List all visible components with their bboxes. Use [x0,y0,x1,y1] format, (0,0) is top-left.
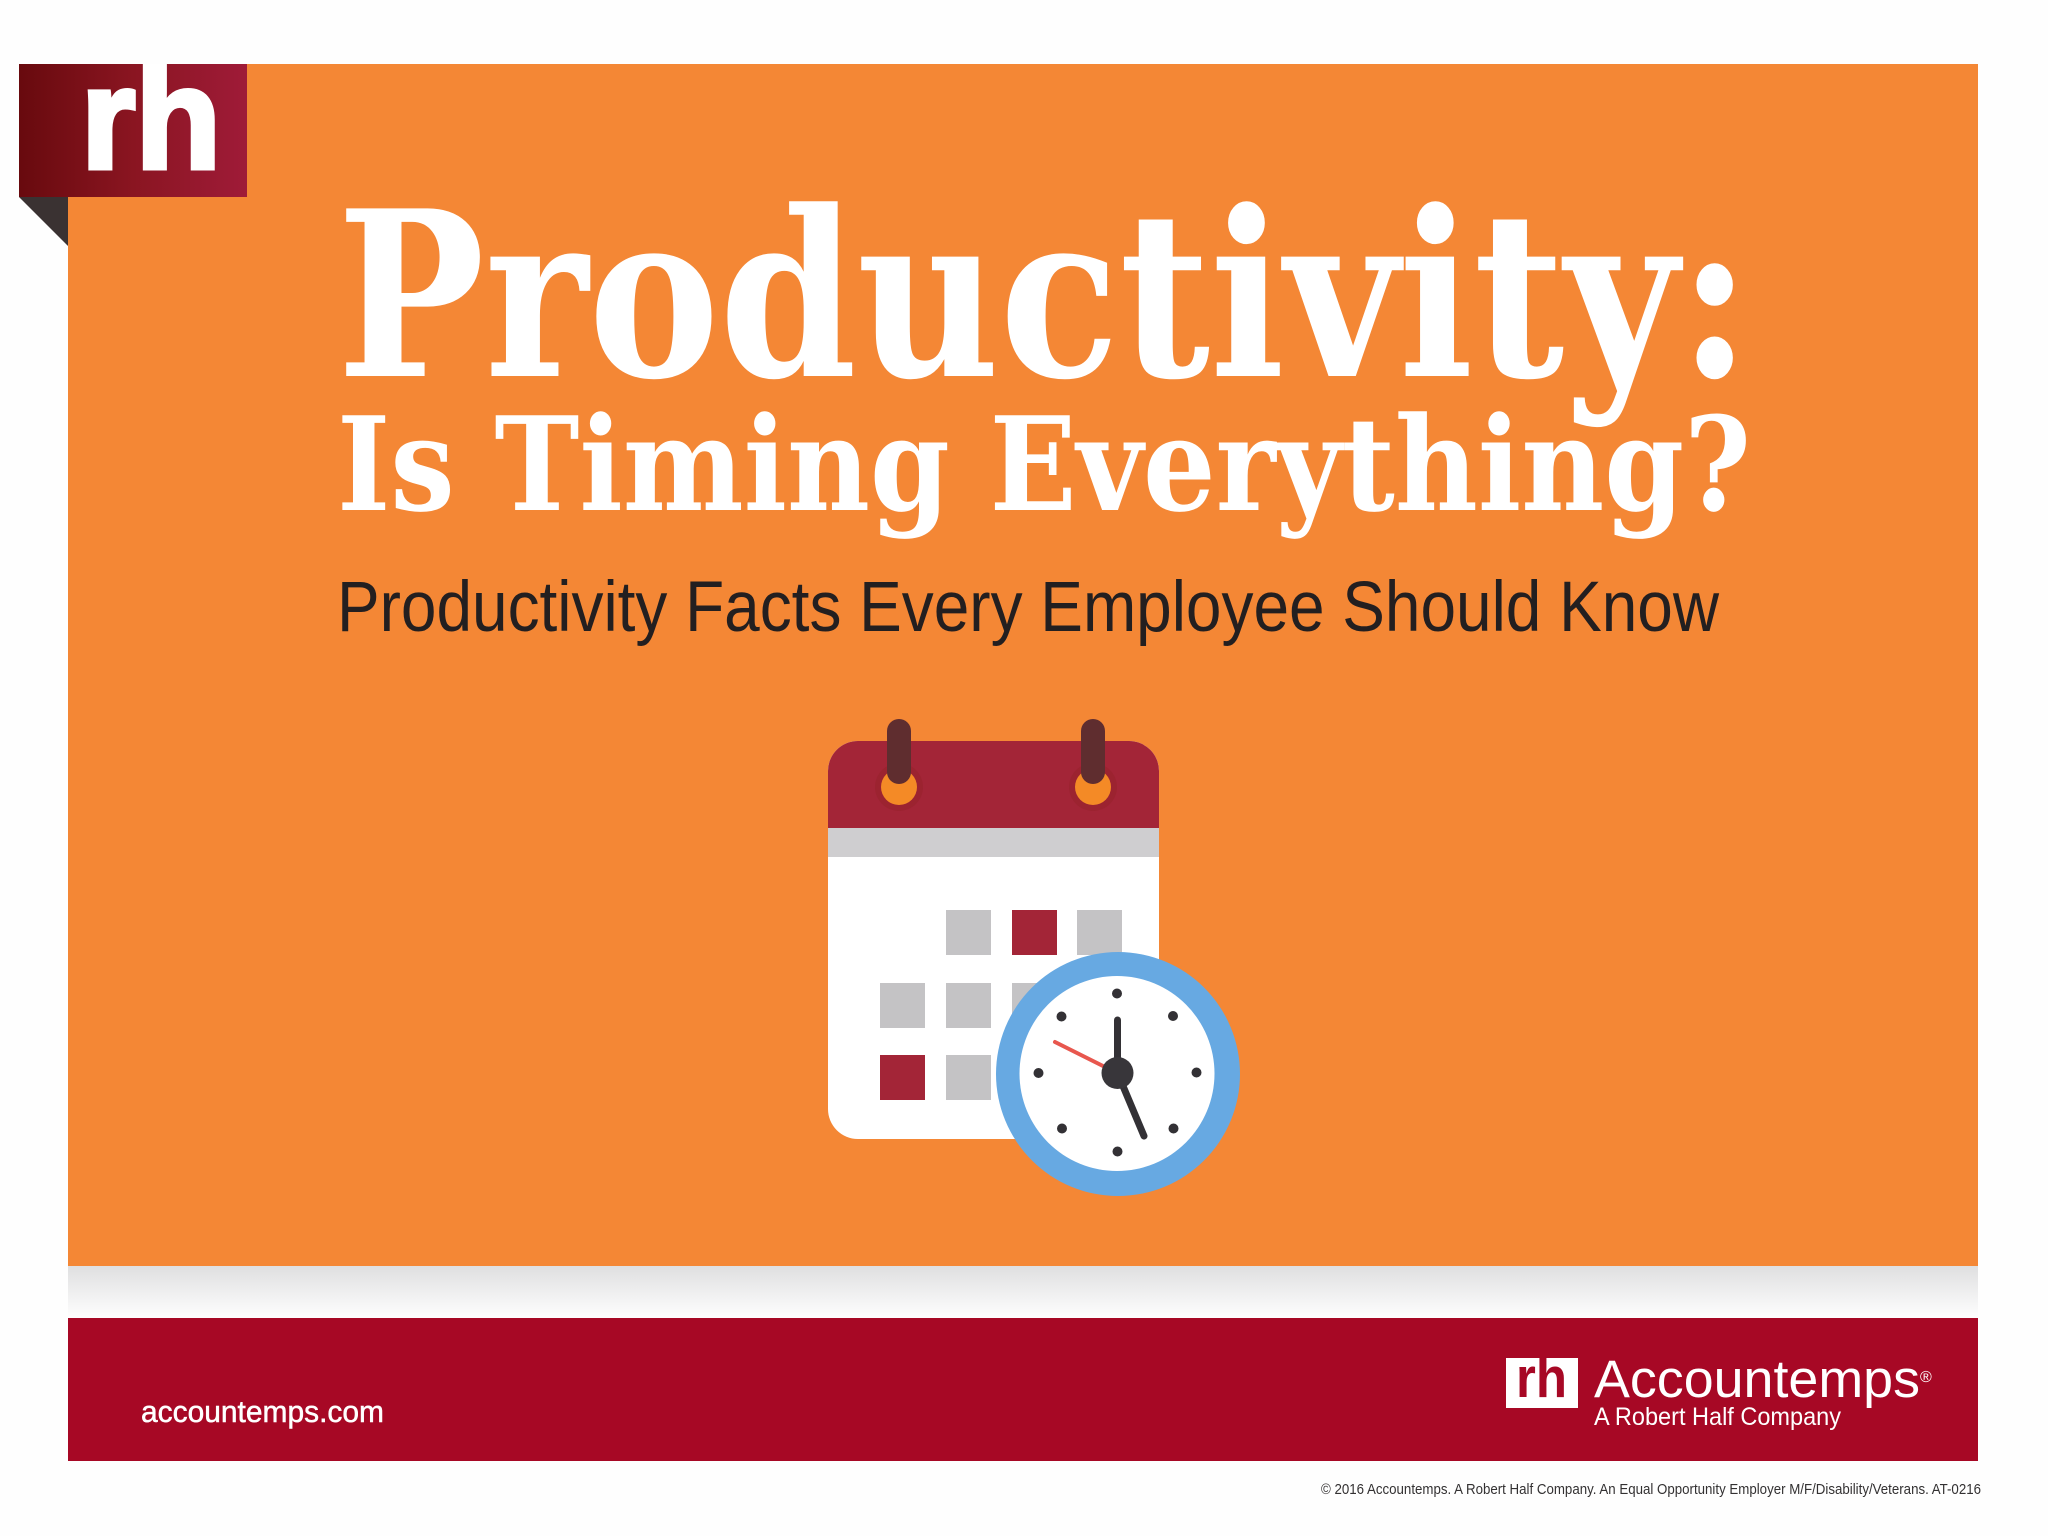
brand tagline: A Robert Half Company [1594,1403,1841,1431]
calendar page [828,741,1159,1139]
calendar binder rings [875,719,1117,811]
brand name: Accountemps [1594,1350,1920,1409]
footer url: accountemps.com [141,1394,384,1429]
clock hour dots [1034,988,1202,1156]
logo: Accountemps lockup [1506,1358,1932,1430]
logo: rh corner tab [19,64,247,246]
copyright line: © 2016 Accountemps. A Robert Half Company. An Equal Opportunity Employer M/F/Disability/Veterans. AT-0216 [1321,1481,1981,1498]
calendar header [828,741,1159,828]
registered mark: ® [1920,1369,1932,1386]
icon: clock [996,952,1240,1196]
panel: orange hero background [68,64,1978,1266]
clock hands [1055,1020,1144,1136]
panel: shadow band under hero [68,1266,1978,1318]
tagline: Productivity Facts Every Employee Should Know [337,568,1720,647]
logo: rh corner tab: rh [81,38,221,199]
panel: red footer band [68,1318,1978,1461]
icon: rh box: rh [1516,1346,1567,1410]
title: Productivity: [337,161,1751,431]
icon: rh box [1506,1358,1578,1408]
calendar day squares [880,910,1122,1100]
calendar grey band [828,828,1159,857]
icon: calendar [828,719,1159,1139]
subtitle: is timing everything: Is Timing Everything? [337,388,1751,541]
